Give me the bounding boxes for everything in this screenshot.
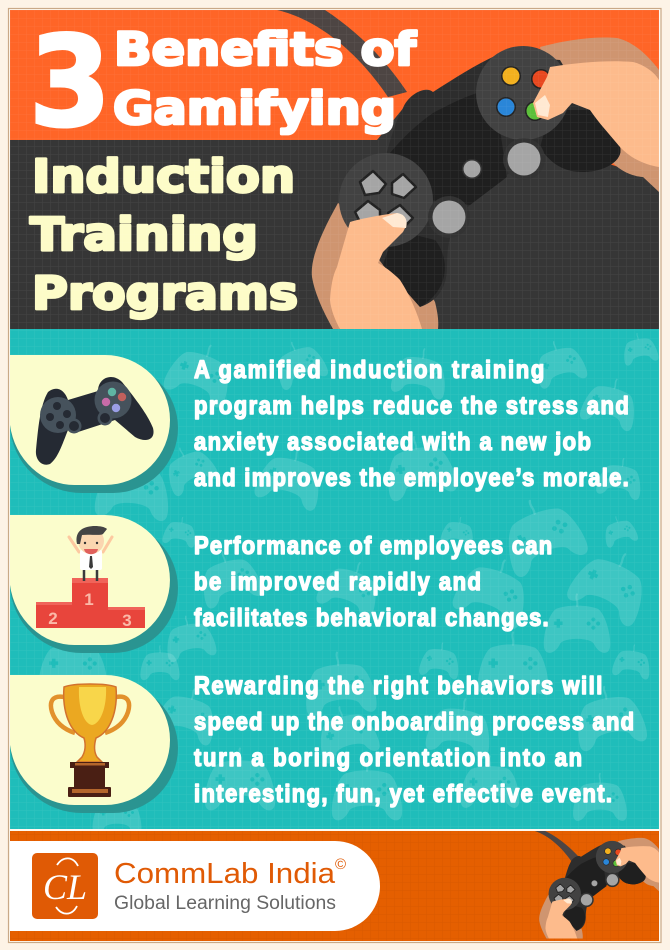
text: benefit 2: Performance of employees can: [194, 532, 552, 559]
footer panel: [10, 829, 659, 941]
text: benefit 3: speed up the onboarding process and: [194, 708, 634, 735]
text: benefit 2: be improved rapidly and: [194, 568, 481, 595]
logo pill: [10, 841, 380, 931]
footer background: [10, 831, 659, 941]
text: benefit 3: [194, 672, 634, 807]
icon: employee on podium: 2: [48, 609, 58, 628]
text: benefit 2: facilitates behavioral changes.: [194, 604, 549, 631]
illustration: hands holding game controller: [312, 37, 659, 329]
text: benefit 1: anxiety associated with a new job: [194, 428, 591, 455]
controller cable: [277, 10, 407, 97]
text: benefit 3: turn a boring orientation into an: [194, 744, 582, 771]
text: benefit 3: interesting, fun, yet effective event.: [194, 780, 612, 807]
copyright mark: ©: [335, 856, 346, 873]
illustration: small controller and cable: [527, 829, 659, 939]
teal texture grid: [10, 329, 659, 829]
teal background: [10, 329, 659, 829]
text: benefit 1: A gamified induction training: [194, 356, 544, 383]
teal content panel: [10, 329, 659, 834]
logo mark: [32, 853, 98, 919]
text: benefit 3: Rewarding the right behaviors will: [194, 672, 602, 699]
icon: employee on podium: 3: [122, 611, 132, 630]
dark title band: [10, 100, 659, 329]
icon panel: game controller: [10, 355, 178, 493]
heading: Programs: Programs: [32, 267, 298, 320]
heading: Induction: Induction: [32, 150, 295, 203]
header texture grid: [10, 10, 659, 329]
text: benefit 1: [194, 356, 629, 491]
icon: employee on podium: 1: [84, 590, 94, 609]
icon: gold trophy: [51, 684, 129, 797]
header panel: [10, 10, 659, 329]
footer texture grid: [10, 831, 659, 941]
heading number 3: 3: [29, 10, 111, 155]
tagline: Global Learning Solutions: [114, 893, 336, 914]
text: benefit 1: program helps reduce the stress and: [194, 392, 629, 419]
text: benefit 1: and improves the employee’s morale.: [194, 464, 629, 491]
logo mark: CL: [43, 867, 87, 907]
orange title band: [10, 10, 659, 200]
gamepad watermark pattern: [39, 330, 659, 834]
heading: Training: Training: [30, 208, 258, 261]
icon: dark gamepad: [36, 377, 154, 465]
icon panel: trophy: [10, 675, 178, 813]
icon: employee on podium: [36, 526, 145, 630]
heading: Benefits of: Benefits of: [114, 23, 416, 76]
text: benefit 2: [194, 532, 552, 631]
brand name: CommLab India: [114, 858, 336, 890]
icon panel: podium: [10, 515, 178, 653]
heading: Gamifying: Gamifying: [113, 82, 396, 135]
